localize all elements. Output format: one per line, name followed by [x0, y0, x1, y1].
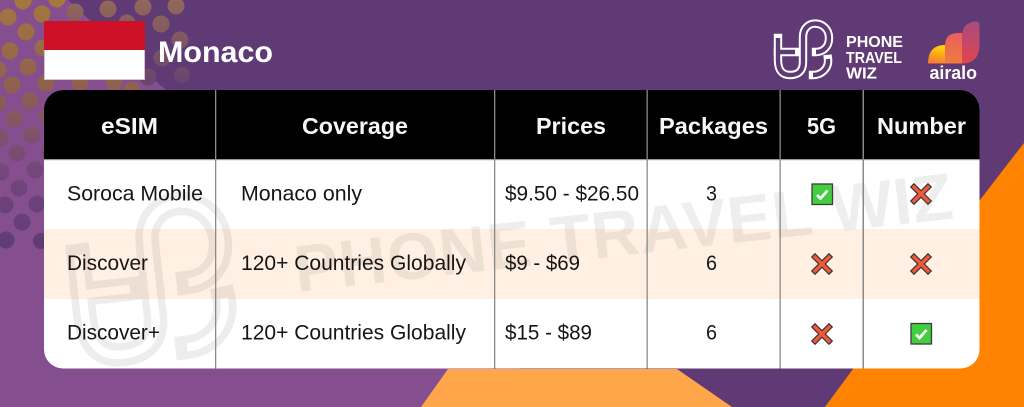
- title: Monaco: [158, 36, 273, 69]
- header row: eSIM: [101, 113, 158, 139]
- row: Soroca Mobile: Soroca Mobile: [67, 182, 203, 206]
- icon: cross: [815, 257, 829, 271]
- row: Discover+: 6: [706, 320, 717, 344]
- logo wordmark: WIZ: [846, 66, 877, 82]
- logo wordmark: PHONE: [846, 34, 903, 51]
- row: Soroca Mobile: $9.50 - $26.50: [505, 182, 639, 206]
- icon: check: [911, 324, 932, 344]
- header row: Prices: [536, 113, 606, 139]
- icon: cross: [914, 257, 928, 271]
- header row: Packages: [659, 113, 768, 139]
- row: Discover+: $15 - $89: [505, 320, 592, 344]
- row: Discover+: Discover+: [67, 320, 160, 344]
- comparison table: [0, 90, 980, 369]
- row: Discover+: [67, 320, 932, 344]
- flag: Monaco: [44, 21, 145, 80]
- header row: 5G: [807, 113, 836, 139]
- row: Soroca Mobile: [67, 182, 928, 206]
- row: Soroca Mobile: Monaco only: [241, 182, 362, 206]
- icon: cross: [914, 187, 928, 201]
- watermark logo: [65, 192, 236, 366]
- icon: check: [812, 184, 832, 204]
- header row: Number: [877, 113, 966, 139]
- row: Discover: 6: [706, 251, 717, 275]
- row: Discover: 120+ Countries Globally: [241, 251, 466, 275]
- header row: [44, 90, 980, 159]
- highlighted row background: [44, 229, 980, 299]
- logo mark: [778, 24, 829, 75]
- row: Soroca Mobile: 3: [706, 182, 717, 206]
- icon: cross: [815, 327, 829, 341]
- watermark text: PHONE TRAVEL WIZ: [290, 159, 956, 306]
- row: Discover+: 120+ Countries Globally: [241, 320, 466, 344]
- header row: Coverage: [302, 113, 408, 139]
- logo wordmark: [846, 34, 903, 82]
- logo wordmark: TRAVEL: [846, 50, 902, 67]
- halftone dots: [0, 0, 190, 249]
- column dividers: [44, 90, 980, 369]
- logo: airalo: [928, 21, 980, 83]
- row: Discover: $9 - $69: [505, 251, 580, 275]
- logo: Phone Travel Wiz: [778, 24, 903, 82]
- watermark: [65, 174, 953, 366]
- row: Discover: Discover: [67, 251, 148, 275]
- row: Discover: [67, 251, 928, 275]
- logo: airalo: airalo: [930, 63, 977, 83]
